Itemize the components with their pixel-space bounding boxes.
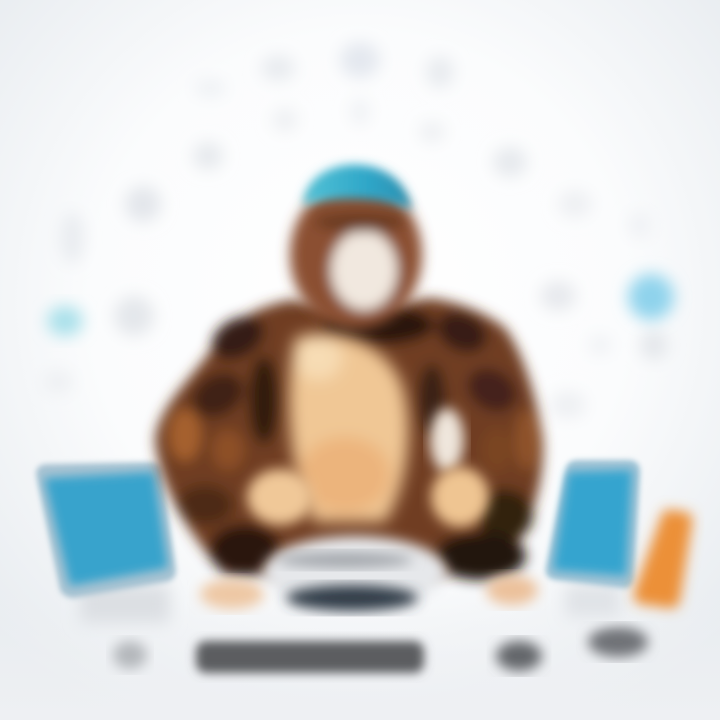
- brow: [314, 212, 406, 232]
- icon: right rectangle: [540, 281, 576, 311]
- upper chest: [294, 336, 342, 380]
- monitor screen: [44, 472, 168, 586]
- blue cap: [303, 165, 412, 210]
- icon: left middle upper: [193, 142, 223, 170]
- right tablet: [546, 460, 692, 657]
- monitor stand: [80, 585, 170, 623]
- icon: right soft: [558, 190, 592, 218]
- head: [290, 181, 422, 329]
- right pale highlight: [430, 408, 464, 472]
- keyboard: [196, 641, 424, 673]
- icon: upper left small: [194, 79, 226, 97]
- icon: light blue dot: [47, 306, 83, 336]
- orange phone: [634, 510, 692, 608]
- icon: left gear: [125, 186, 161, 222]
- icon: lower left soft: [43, 370, 73, 394]
- icon: lower right soft: [550, 391, 586, 419]
- face: [331, 230, 397, 310]
- icon: top left: [261, 55, 295, 81]
- mouse: [496, 641, 542, 671]
- tablet screen: [553, 470, 632, 576]
- belly tone: [299, 437, 391, 513]
- monitor bezel: [36, 462, 176, 598]
- right hand: [431, 467, 489, 527]
- icon: below top left: [272, 108, 298, 132]
- laptop dark band: [286, 585, 418, 611]
- right foot: [486, 575, 538, 605]
- icon: below top centre: [350, 98, 370, 126]
- chest and belly: [289, 334, 408, 522]
- tablet base: [588, 627, 648, 657]
- laptop: [263, 536, 447, 611]
- icon: far right soft: [628, 211, 652, 239]
- icon: bulb stem: [640, 330, 668, 360]
- left arm mottling: [169, 308, 281, 576]
- neck shadow: [322, 305, 434, 345]
- laptop mid band: [277, 552, 413, 568]
- body fur: [155, 298, 543, 575]
- monitor base: [113, 641, 147, 669]
- tablet stand: [565, 585, 620, 617]
- chest: [289, 334, 408, 522]
- icon: top right: [426, 56, 454, 88]
- right arm mottling: [418, 304, 539, 580]
- left hand: [247, 469, 313, 525]
- gorilla: [155, 298, 543, 580]
- icon: top centre: [340, 42, 380, 78]
- icon: far left bar: [60, 212, 84, 264]
- icon: left circle: [114, 296, 154, 336]
- left monitor: [36, 462, 176, 669]
- left foot: [200, 579, 264, 609]
- laptop shell: [263, 536, 447, 608]
- icon: below top right: [419, 121, 445, 143]
- floor shade: [0, 590, 720, 720]
- floating icons: [43, 42, 668, 419]
- icon: light blue bulb: [628, 274, 674, 320]
- icon: right lower small: [588, 335, 612, 355]
- tablet bezel: [546, 460, 640, 588]
- icon: right middle upper: [493, 147, 527, 177]
